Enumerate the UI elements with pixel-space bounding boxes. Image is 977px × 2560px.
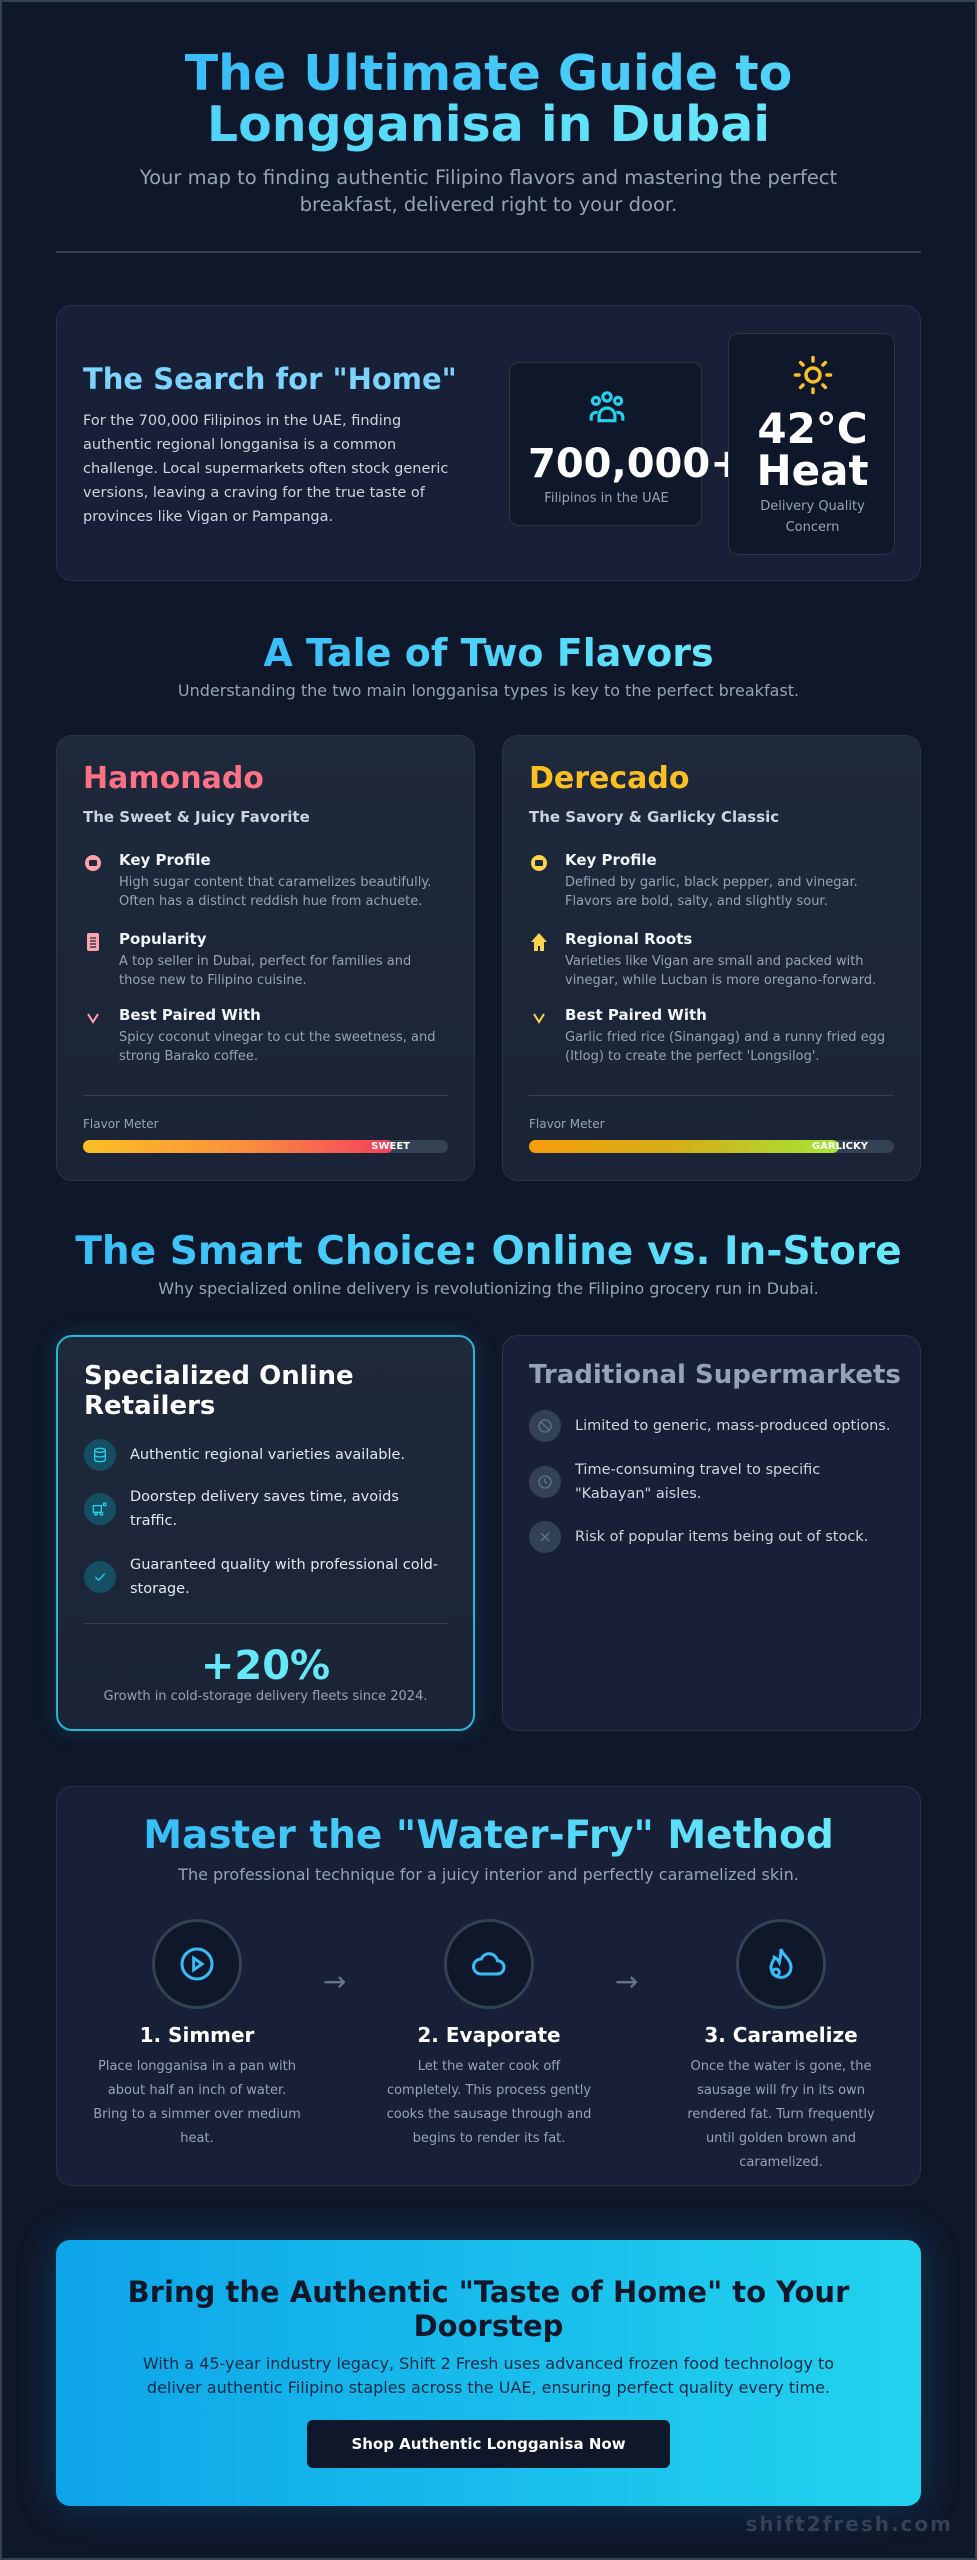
list item: authentic: Authentic regional varieties available.	[130, 1447, 405, 1463]
step: evaporate: 2. Evaporate	[417, 2023, 561, 2047]
item: key profile	[85, 851, 431, 909]
item: best paired: Best Paired With	[119, 1006, 261, 1024]
step: caramelize	[687, 1919, 875, 2170]
icon: people	[590, 391, 624, 422]
stat: 700,000+: Filipinos in the UAE	[544, 491, 669, 506]
step: simmer: 1. Simmer	[140, 2023, 254, 2047]
card: online retailers	[56, 1335, 475, 1731]
list item: authentic	[84, 1439, 405, 1471]
arrow: →	[615, 1965, 638, 1998]
card: online retailers: Growth in cold-storage delivery fleets since 2024.	[104, 1689, 427, 1704]
cta button: Shop Authentic Longganisa Now	[351, 2435, 626, 2453]
card: derecado: The Savory & Garlicky Classic	[529, 808, 779, 826]
list item: delivery: traffic.	[130, 1513, 177, 1529]
flavor meter: sweet	[83, 1117, 448, 1153]
stat: 42C heat: Concern	[786, 520, 839, 535]
cta text: With a 45-year industry legacy, Shift 2 Fresh uses advanced frozen food technology to deliver authentic Filipino staples across the UAE, ensuring perfect quality every time.	[143, 2354, 834, 2397]
panel: water-fry method	[56, 1786, 921, 2186]
heading: water-fry: Master the "Water-Fry" Method	[143, 1813, 834, 1858]
icon: sun	[794, 356, 832, 394]
flavor meter: garlicky: Flavor Meter	[529, 1117, 605, 1131]
list item: quality	[84, 1557, 438, 1597]
flavor meter: sweet: Flavor Meter	[83, 1117, 159, 1131]
heading: search for home: The Search for "Home"	[83, 362, 457, 396]
list item: quality: Guaranteed quality with professional cold-	[130, 1557, 438, 1573]
stat: 42C heat	[728, 333, 895, 555]
stat: +20%: +20%	[201, 1643, 330, 1689]
item: regional roots	[531, 930, 876, 988]
step: simmer: Place longganisa in a pan with about half an inch of water. Bring to a simmer over medium heat.	[93, 2059, 301, 2146]
list item: travel: "Kabayan" aisles.	[575, 1486, 701, 1502]
card: online retailers: Specialized Online	[84, 1361, 354, 1391]
step: caramelize: Once the water is gone, the sausage will fry in its own rendered fat. Turn frequently until golden brown and caramelized.	[687, 2059, 875, 2170]
stat: 700,000+: 700,000+	[528, 441, 744, 487]
list item: stock: Risk of popular items being out of stock.	[575, 1529, 868, 1545]
item: popularity	[87, 930, 411, 988]
stat: 700,000+	[509, 362, 702, 526]
card: online retailers: Retailers	[84, 1391, 215, 1421]
list item: quality: storage.	[130, 1581, 190, 1597]
title	[185, 45, 792, 153]
panel: water-fry method: The professional technique for a juicy interior and perfectly caramelized skin.	[178, 1865, 799, 1884]
cta heading: Bring the Authentic "Taste of Home" to Your Doorstep	[128, 2275, 849, 2343]
list item: travel	[529, 1462, 820, 1502]
item: popularity: Popularity	[119, 930, 206, 948]
item: best paired	[87, 1006, 436, 1064]
list item: travel: Time-consuming travel to specific	[575, 1462, 820, 1478]
step: evaporate: Let the water cook off completely. This process gently cooks the sausage through and begins to render its fat.	[387, 2059, 591, 2146]
card: derecado	[502, 735, 921, 1181]
card: hamonado	[56, 735, 475, 1181]
item: regional roots: Varieties like Vigan are small and packed with vinegar, while Lucban is more oregano-forward.	[565, 954, 876, 988]
title: Longganisa in Dubai	[207, 96, 770, 153]
stat: 42C heat: 42°C	[757, 404, 868, 453]
item: best paired	[533, 1006, 885, 1064]
heading: smart choice: The Smart Choice: Online vs. In-Store	[75, 1229, 902, 1274]
item: key profile: Key Profile	[565, 851, 657, 869]
arrow: →	[323, 1965, 346, 1998]
card: traditional supermarkets: Traditional Supermarkets	[529, 1360, 901, 1390]
stat: 42C heat: Heat	[756, 446, 869, 495]
list item: delivery: Doorstep delivery saves time, avoids	[130, 1489, 399, 1505]
item: key profile: Defined by garlic, black pepper, and vinegar. Flavors are bold, salty, and slightly sour.	[565, 875, 858, 909]
card: hamonado: The Sweet & Juicy Favorite	[83, 808, 310, 826]
footer brand: shift2fresh.com	[746, 2512, 953, 2536]
cta panel	[56, 2240, 921, 2506]
panel: search for home	[56, 305, 921, 581]
item: best paired: Spicy coconut vinegar to cut the sweetness, and strong Barako coffee.	[119, 1030, 436, 1064]
item: best paired: Garlic fried rice (Sinangag) and a runny fried egg (Itlog) to create the perfect 'Longsilog'.	[565, 1030, 885, 1064]
list item: stock	[529, 1521, 868, 1553]
title: The Ultimate Guide to	[185, 45, 792, 102]
step: simmer	[93, 1919, 301, 2146]
card: hamonado: Hamonado	[83, 761, 264, 796]
list item: delivery	[84, 1489, 399, 1529]
step: evaporate	[387, 1919, 591, 2146]
card: derecado: Derecado	[529, 761, 690, 796]
item: popularity: A top seller in Dubai, perfect for families and those new to Filipino cuisine.	[119, 954, 411, 988]
step: caramelize: 3. Caramelize	[704, 2023, 858, 2047]
item: key profile: Key Profile	[119, 851, 211, 869]
item: best paired: Best Paired With	[565, 1006, 707, 1024]
cta button	[307, 2420, 670, 2468]
stat: 42C heat: Delivery Quality	[760, 499, 865, 514]
heading: tale of two flavors: A Tale of Two Flavors	[263, 631, 714, 675]
flavor meter: garlicky: GARLICKY	[812, 1141, 868, 1152]
item: key profile	[531, 851, 858, 909]
list item: limited: Limited to generic, mass-produced options.	[575, 1418, 890, 1434]
flavor meter: garlicky	[529, 1117, 894, 1153]
item: regional roots: Regional Roots	[565, 930, 692, 948]
subtitle: smart choice: Why specialized online delivery is revolutionizing the Filipino grocery run in Dubai.	[158, 1279, 819, 1298]
subtitle: flavors: Understanding the two main longganisa types is key to the perfect breakfast.	[178, 681, 799, 700]
flavor meter: sweet: SWEET	[371, 1141, 410, 1152]
list item: limited	[529, 1410, 890, 1442]
subtitle: Your map to finding authentic Filipino flavors and mastering the perfect breakfast, delivered right to your door.	[140, 166, 837, 216]
text: search intro: For the 700,000 Filipinos in the UAE, finding authentic regional longganisa is a common challenge. Local supermarkets often stock generic versions, leaving a craving for the true taste of provinces like Vigan or Pampanga.	[83, 413, 448, 525]
item: key profile: High sugar content that caramelizes beautifully. Often has a distinct reddish hue from achuete.	[119, 875, 431, 909]
card: traditional supermarkets	[502, 1335, 921, 1731]
